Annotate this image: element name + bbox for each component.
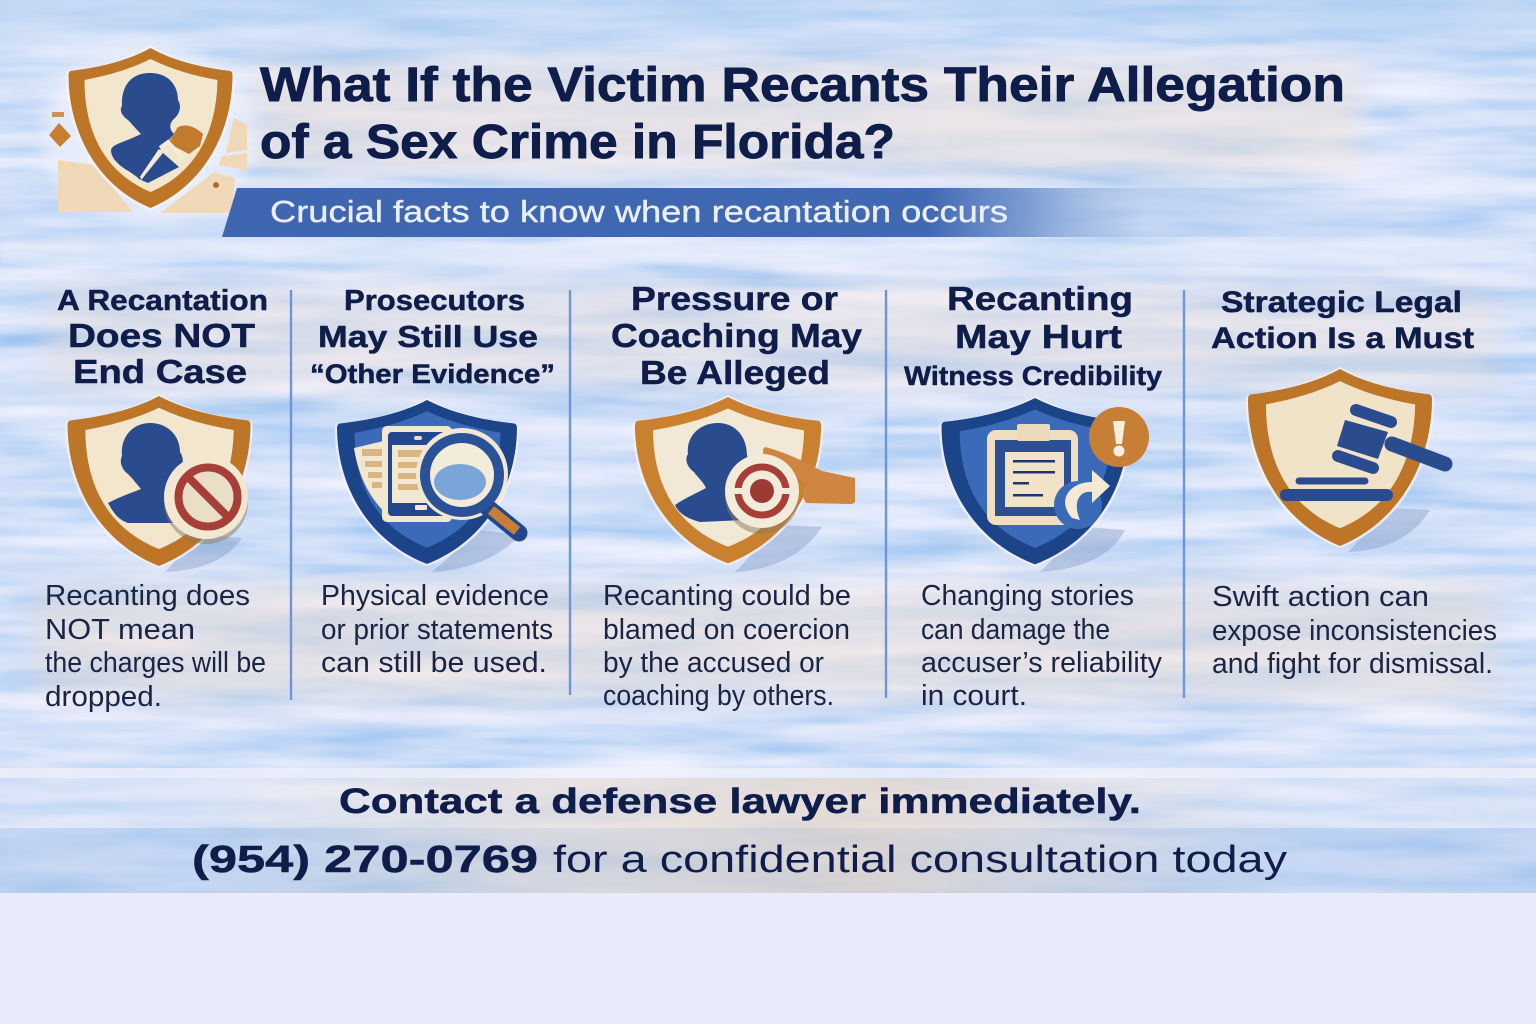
- body text: Physical evidence: [321, 580, 549, 612]
- footer call to action: Contact a defense lawyer immediately.: [339, 782, 1141, 821]
- body text: can still be used.: [321, 647, 547, 679]
- icon: shield with person, target and pointing hand: [633, 395, 855, 572]
- heading: A Recantation: [57, 285, 268, 317]
- panel: strategic legal action: [1211, 286, 1497, 680]
- heading: Prosecutors: [344, 285, 525, 317]
- body text: accuser’s reliability: [921, 647, 1163, 679]
- body text: [1212, 581, 1497, 680]
- heading: [310, 285, 555, 389]
- heading: Witness Credibility: [904, 361, 1162, 391]
- heading: End Case: [73, 353, 247, 390]
- body text: coaching by others.: [603, 680, 834, 712]
- heading: [611, 280, 863, 391]
- footer band background: [0, 768, 1536, 893]
- body text: by the accused or: [603, 647, 824, 679]
- body text: and fight for dismissal.: [1212, 648, 1493, 680]
- body text: dropped.: [45, 681, 162, 713]
- icon: shield with gavel: [1246, 367, 1445, 552]
- heading: “Other Evidence”: [310, 359, 555, 389]
- body text: expose inconsistencies: [1212, 615, 1497, 647]
- magnifier: [416, 428, 508, 520]
- panel: recantation does not end case: [45, 285, 268, 713]
- body text: can damage the: [921, 614, 1110, 646]
- body text: [45, 580, 266, 713]
- heading: Action Is a Must: [1211, 322, 1474, 355]
- heading: [1211, 286, 1474, 355]
- heading: Be Alleged: [640, 354, 830, 391]
- title: of a Sex Crime in Florida?: [260, 116, 895, 169]
- body text: Changing stories: [921, 580, 1134, 612]
- body text: blamed on coercion: [603, 614, 850, 646]
- column dividers: [291, 290, 1184, 700]
- heading: May Hurt: [955, 318, 1122, 355]
- header shield icon: [42, 43, 258, 227]
- body text: or prior statements: [321, 614, 553, 646]
- footer call to action: for a confidential consultation today: [553, 839, 1287, 881]
- heading: [57, 285, 268, 390]
- icon: shield with clipboard, arrow and alert: [939, 396, 1149, 572]
- heading: Coaching May: [611, 317, 863, 354]
- title: What If the Victim Recants Their Allegation: [260, 59, 1345, 112]
- footer call to action: (954) 270-0769: [192, 839, 538, 881]
- body text: [921, 580, 1163, 712]
- panel: witness credibility: [904, 280, 1163, 712]
- body text: Recanting could be: [603, 580, 851, 612]
- heading: Strategic Legal: [1221, 286, 1462, 319]
- bottom blank panel: [0, 893, 1536, 1024]
- body text: [603, 580, 851, 712]
- body text: Swift action can: [1212, 581, 1429, 613]
- subtitle banner: [222, 188, 1440, 237]
- body text: NOT mean: [45, 614, 195, 646]
- heading: Recanting: [947, 280, 1133, 317]
- body text: the charges will be: [45, 647, 266, 679]
- body text: in court.: [921, 680, 1027, 712]
- heading: May Still Use: [318, 319, 538, 354]
- panel: prosecutors may use other evidence: [310, 285, 555, 679]
- subtitle banner: Crucial facts to know when recantation occurs: [270, 194, 1008, 229]
- paper: [354, 440, 388, 515]
- title: [260, 59, 1345, 169]
- panel: pressure or coaching: [603, 280, 863, 712]
- icon: shield with person and prohibition sign: [65, 394, 253, 572]
- heading: Pressure or: [631, 280, 838, 317]
- heading: [904, 280, 1162, 391]
- body text: Recanting does: [45, 580, 250, 612]
- icon: shield with tablet and magnifier: [335, 398, 520, 572]
- body text: [321, 580, 553, 679]
- footer call to action: [192, 782, 1287, 881]
- heading: Does NOT: [68, 317, 255, 354]
- torn paper pieces: [58, 118, 247, 213]
